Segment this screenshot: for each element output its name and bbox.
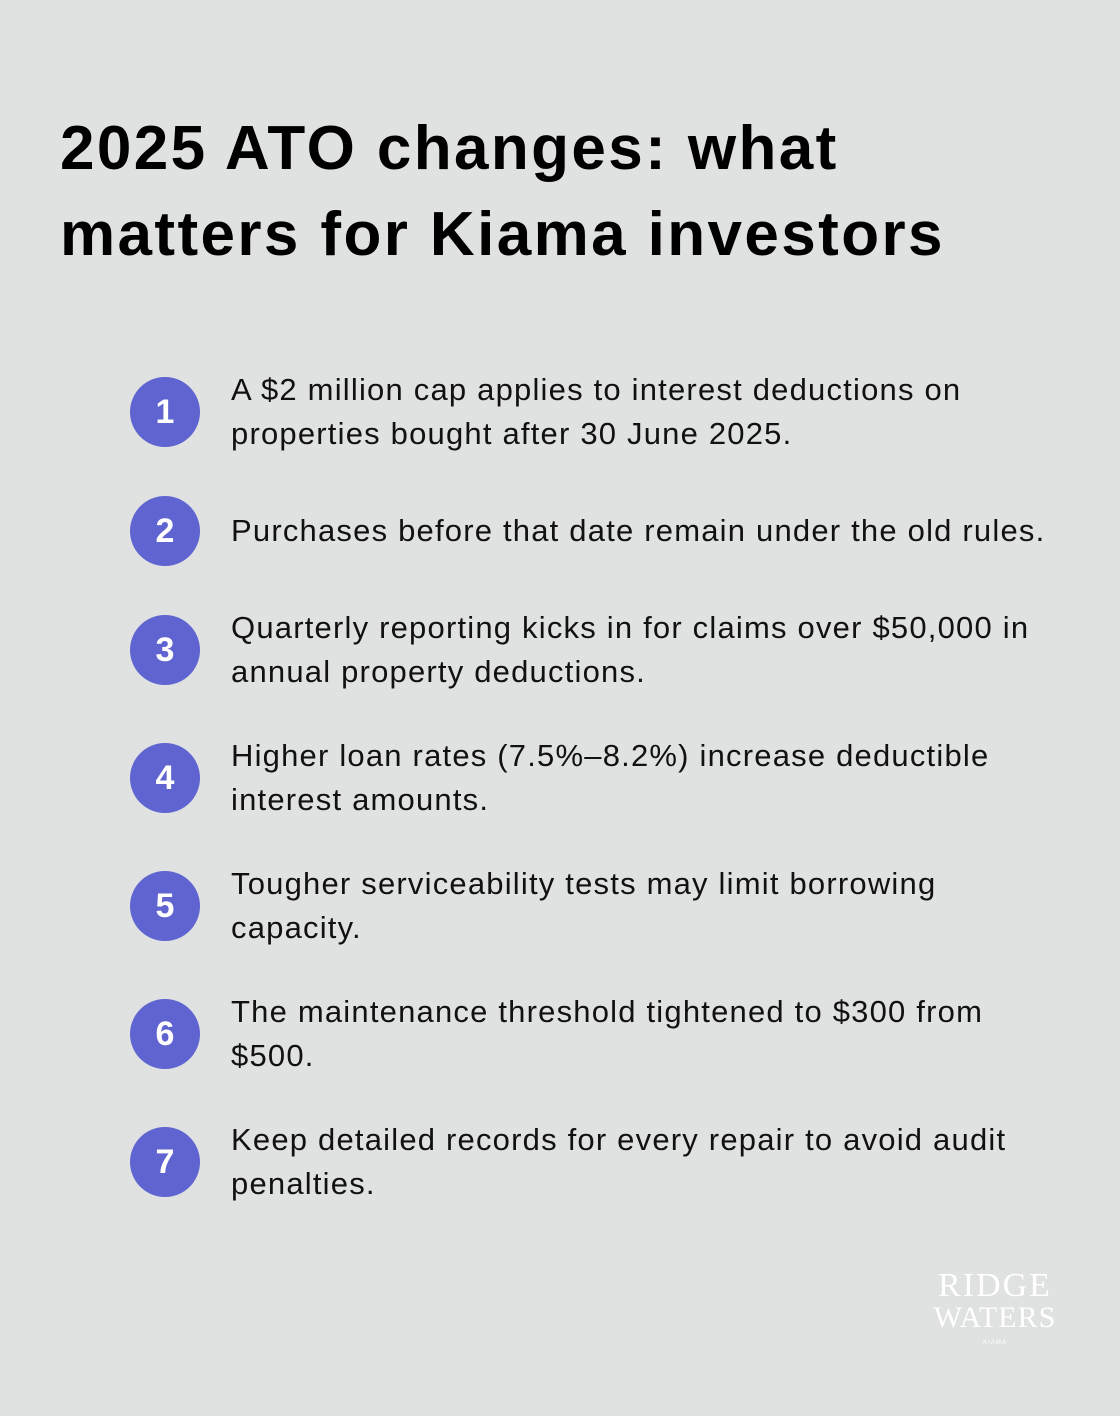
item 4: 4 [156,759,174,797]
item 2: Purchases before that date remain under the old rules. [231,513,1045,548]
text: penalties. [231,1166,376,1201]
logo [934,1267,1056,1346]
title: 2025 ATO changes: what [60,114,839,183]
logo: KIAMA [983,1340,1007,1346]
text: annual property deductions. [231,654,646,689]
item 4 [130,738,989,817]
item 7 [130,1122,1006,1201]
text: properties bought after 30 June 2025. [231,416,792,451]
text: interest amounts. [231,782,489,817]
text: A $2 million cap applies to interest deductions on [231,372,961,407]
text: Tougher serviceability tests may limit borrowing [231,866,936,901]
title: matters for Kiama investors [60,200,945,269]
item 5 [130,866,936,945]
item 6: 6 [156,1015,174,1053]
item 3: 3 [156,631,174,669]
item 2: 2 [156,512,174,550]
item 5: 5 [156,887,174,925]
item 1: 1 [156,393,174,431]
text: Keep detailed records for every repair to avoid audit [231,1122,1006,1157]
item 7: 7 [156,1143,174,1181]
text: The maintenance threshold tightened to $300 from [231,994,983,1029]
logo: RIDGE [938,1267,1052,1304]
text: Quarterly reporting kicks in for claims over $50,000 in [231,610,1029,645]
text: $500. [231,1038,315,1073]
text: Higher loan rates (7.5%–8.2%) increase deductible [231,738,989,773]
text: capacity. [231,910,362,945]
item 1 [130,372,961,451]
item 2 [130,496,1045,566]
item 3 [130,610,1029,689]
logo: WATERS [934,1301,1056,1334]
title [60,114,945,269]
item 6 [130,994,983,1073]
